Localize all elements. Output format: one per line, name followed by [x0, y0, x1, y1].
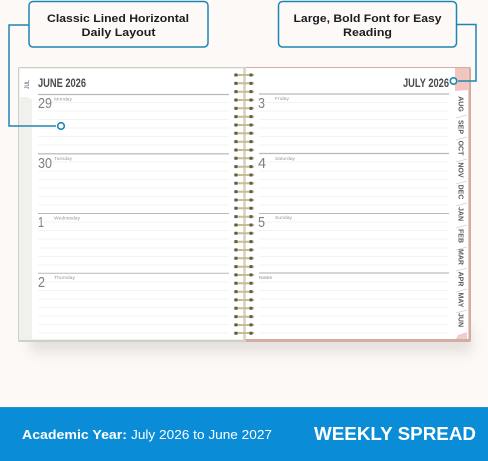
spiral binding [234, 67, 254, 342]
day: Thursday 2: Thursday [54, 275, 76, 281]
footer banner [0, 407, 488, 461]
day: Sunday 5: 5 [258, 214, 265, 231]
month tabs: MAY [457, 293, 464, 308]
day: Sunday 5: Sunday [275, 215, 293, 221]
icon: right connector dot [450, 78, 457, 84]
month tabs: OCT [457, 141, 464, 156]
month tabs: JAN [457, 207, 464, 221]
callout: classic lined horizontal daily layout [9, 2, 208, 129]
ruled lines: right page [259, 102, 449, 333]
day: Tuesday 30: Tuesday [54, 156, 73, 161]
ruled lines: left page [38, 102, 229, 333]
day: Friday 3 [258, 95, 290, 112]
day: Monday 29: Monday [54, 96, 73, 102]
day: Saturday 4 [258, 155, 296, 172]
month tabs: JUN [457, 313, 464, 327]
panel: right planner page [244, 67, 471, 342]
footer text: academic year: July 2026 to June 2027 [131, 427, 272, 442]
month tabs: APR [457, 272, 464, 286]
callout box: right [278, 2, 456, 47]
callout box: left [29, 2, 208, 47]
day: Friday 3: 3 [258, 95, 265, 112]
day: Saturday 4: Saturday [275, 156, 296, 161]
month tabs: NOV [457, 162, 464, 178]
day: Saturday 4: 4 [258, 155, 266, 172]
callout text: left: Daily Layout [82, 27, 156, 39]
day: Tuesday 30: 30 [38, 155, 52, 172]
callout text: right: Reading [343, 27, 392, 39]
connector: left callout to Monday lines [9, 25, 56, 126]
footer text: academic year: Academic Year: [22, 427, 127, 442]
heading: June 2026: JUNE 2026 [38, 78, 86, 90]
day: Friday 3: Friday [275, 96, 290, 101]
month tabs: DEC [457, 185, 464, 199]
callout text: left: Classic Lined Horizontal [47, 13, 189, 25]
connector: right callout to July heading [457, 24, 476, 81]
day: Wednesday 1: 1 [38, 214, 44, 231]
month tabs: AUG [457, 96, 464, 112]
day dividers: right page [259, 94, 449, 273]
icon: pink bottom corner [456, 332, 467, 339]
callout: large bold font [278, 2, 476, 84]
day: Sunday 5 [258, 214, 293, 231]
day: Wednesday 1: Wednesday [54, 216, 81, 222]
heading: July 2026: JULY 2026 [403, 78, 449, 90]
month tabs: MAR [457, 249, 464, 265]
icon: JUL tab [20, 69, 32, 100]
day: Wednesday 1 [38, 214, 81, 231]
icon: left connector dot [58, 123, 64, 129]
icon: JUL tab: JUL [24, 80, 31, 89]
icon: pink July tab [455, 68, 468, 91]
day dividers: left page [38, 94, 229, 273]
day: Thursday 2 [38, 274, 76, 291]
day: Thursday 2: 2 [38, 274, 45, 291]
day: Tuesday 30 [38, 155, 73, 172]
planner shadow [30, 325, 472, 353]
callout text: right [294, 13, 442, 39]
day: Monday 29: 29 [38, 95, 52, 112]
panel: left planner page [18, 67, 244, 342]
month tabs: FEB [457, 229, 464, 243]
month tabs [456, 96, 467, 327]
label: Notes: Notes [259, 275, 273, 281]
callout text: right: Large, Bold Font for Easy [294, 13, 442, 25]
day: Monday 29 [38, 95, 73, 112]
month tabs: SEP [457, 120, 464, 134]
callout text: left [47, 13, 189, 39]
footer text: weekly spread: WEEKLY SPREAD [314, 424, 476, 444]
